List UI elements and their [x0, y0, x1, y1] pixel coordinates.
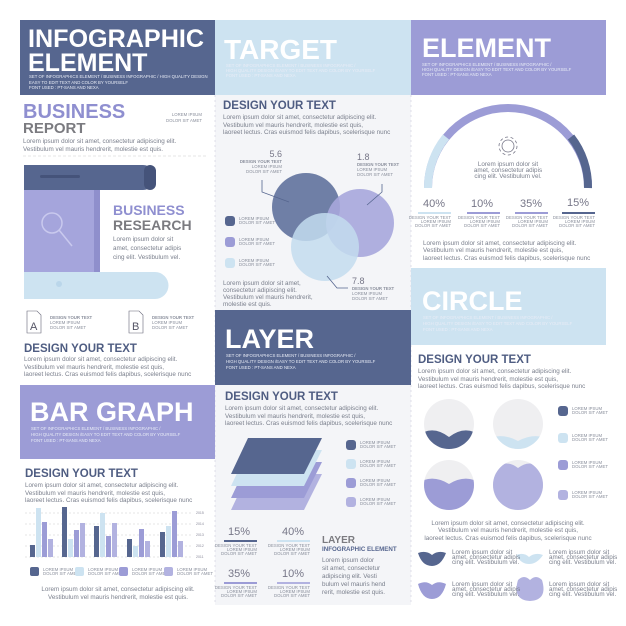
layer legend: DOLOR SIT AMET: [360, 463, 396, 468]
layer infographic element text: rerit, molestie est quis.: [322, 589, 385, 596]
header: circle: [411, 268, 606, 345]
element percentages: DOLOR SIT AMET: [464, 223, 500, 228]
element percentages: DOLOR SIT AMET: [415, 223, 451, 228]
venn diagram: DESIGN YOUR TEXT: [240, 159, 282, 164]
circle legend: DOLOR SIT AMET: [572, 437, 608, 442]
circle legend: DOLOR SIT AMET: [572, 410, 608, 415]
wave shapes row: amet, consectetur adipis: [549, 554, 617, 561]
header: layer: [215, 310, 411, 385]
business research graphic: [24, 165, 192, 299]
layer percentages: 10%: [282, 568, 304, 580]
doc icons A B: A: [30, 321, 38, 333]
doc icons A B: DOLOR SIT AMET: [152, 325, 188, 330]
layer percentages: DESIGN YOUR TEXT: [215, 585, 257, 590]
wave shapes row: [418, 549, 617, 601]
venn diagram: LOREM IPSUM: [357, 167, 388, 172]
header: layer: LAYER: [225, 324, 314, 354]
target text: DESIGN YOUR TEXT: [223, 100, 336, 112]
layer percentages: DESIGN YOUR TEXT: [268, 543, 310, 548]
layer legend: LOREM IPSUM: [360, 497, 391, 502]
bar legend: LOREM IPSUM: [132, 567, 163, 572]
layer percentages: DOLOR SIT AMET: [274, 551, 310, 556]
venn legend: DOLOR SIT AMET: [239, 262, 275, 267]
column backgrounds: [215, 95, 411, 605]
venn text: Lorem ipsum dolor sit amet,: [223, 280, 301, 287]
bar chart: 2015: [196, 511, 204, 515]
business research graphic: RESEARCH: [113, 217, 192, 233]
business report heading: [23, 101, 206, 156]
layer infographic element text: bulum vel mauris hend: [322, 581, 386, 588]
layer percentages: LOREM IPSUM: [280, 547, 310, 552]
header: infographic element: SET OF INFOGRAPHICS ELEMENT / BUSINESS INFOGRAPHIC / HIGH QUALITY DESIGN: [29, 74, 208, 79]
venn legend: LOREM IPSUM: [239, 237, 270, 242]
header: infographic element: INFOGRAPHIC: [28, 25, 204, 53]
layer percentages: DOLOR SIT AMET: [221, 551, 257, 556]
element text: Vestibulum vel mauris hendrerit, molestie est quis,: [423, 247, 563, 254]
header: element: [411, 20, 606, 95]
venn text: molestie est quis.: [223, 301, 272, 308]
wave shapes row: Lorem ipsum dolor sit: [549, 549, 609, 556]
layer text: laoreet lectus. Cras euismod felis dapibus, scelerisque nunc: [225, 420, 392, 427]
header: element: FONT USED : PT-SANS AND NEXA: [422, 72, 492, 77]
doc icons A B: B: [132, 321, 139, 333]
text block col1: Lorem ipsum dolor sit amet, consectetur adipiscing elit.: [24, 356, 178, 363]
bar graph footer text: Vestibulum vel mauris hendrerit, molestie est quis.: [48, 594, 188, 601]
header: target: FONT USED : PT-SANS AND NEXA: [226, 73, 296, 78]
business report heading: LOREM IPSUM: [172, 112, 202, 117]
business report heading: DOLOR SIT AMET: [166, 118, 202, 123]
element percentages: LOREM IPSUM: [470, 219, 500, 224]
header: layer: FONT USED : PT-SANS AND NEXA: [226, 365, 296, 370]
wave shapes row: amet, consectetur adipis: [452, 586, 520, 593]
text block col1: Vestibulum vel mauris hendrerit, molestie est quis,: [24, 364, 164, 371]
business report heading: Vestibulum vel mauris hendrerit, molestie est quis.: [23, 146, 163, 153]
wave shapes row: amet, consectetur adipis: [452, 554, 520, 561]
layer percentages: 40%: [282, 526, 304, 538]
venn diagram: DOLOR SIT AMET: [246, 169, 282, 174]
doc icons A B: LOREM IPSUM: [152, 320, 183, 325]
layer legend: DOLOR SIT AMET: [360, 501, 396, 506]
bar chart: 2012: [196, 544, 204, 548]
element percentages: DESIGN YOUR TEXT: [506, 215, 548, 220]
wave shapes row: amet, consectetur adipis: [549, 586, 617, 593]
bar graph footer text: [41, 586, 195, 601]
wave shapes row: Lorem ipsum dolor sit: [452, 549, 512, 556]
header: circle: FONT USED : PT-SANS AND NEXA: [423, 327, 493, 332]
layer percentages: LOREM IPSUM: [280, 589, 310, 594]
circle text: laoreet lectus. Cras euismod felis dapibus, scelerisque nunc: [418, 383, 585, 390]
header: element: ELEMENT: [422, 33, 552, 63]
header: target: HIGH QUALITY DESIGN /EASY TO EDIT TEXT AND COLOR BY YOURSELF: [226, 68, 376, 73]
layer percentages: DESIGN YOUR TEXT: [268, 585, 310, 590]
circle text: Vestibulum vel mauris hendrerit, molestie est quis,: [418, 376, 558, 383]
layer stack graphic: [231, 438, 322, 510]
bar graph text: [25, 468, 192, 504]
doc icons A B: DOLOR SIT AMET: [50, 325, 86, 330]
venn legend: DOLOR SIT AMET: [239, 220, 275, 225]
business research graphic: Lorem ipsum dolor sit: [113, 236, 173, 243]
layer legend: [346, 440, 396, 507]
text block col1: DESIGN YOUR TEXT: [24, 343, 137, 355]
bar chart: [25, 507, 204, 559]
venn diagram: LOREM IPSUM: [252, 164, 282, 169]
header: target: TARGET: [224, 34, 337, 65]
layer text: DESIGN YOUR TEXT: [225, 391, 338, 403]
bar legend: DOLOR SIT AMET: [132, 571, 168, 576]
element percentages: 10%: [471, 198, 493, 210]
circle footer text: Vestibulum vel mauris hendrerit, molestie est quis,: [438, 527, 578, 534]
layer infographic element text: [322, 535, 397, 596]
circle legend: LOREM IPSUM: [572, 490, 603, 495]
header: infographic element: FONT USED : PT-SANS AND NEXA: [29, 85, 99, 90]
layer percentages: 35%: [228, 568, 250, 580]
layer percentages: [215, 526, 310, 598]
layer percentages: DOLOR SIT AMET: [221, 593, 257, 598]
circle legend: DOLOR SIT AMET: [572, 494, 608, 499]
venn legend: [225, 216, 275, 268]
circle charts: [424, 399, 543, 515]
layer percentages: DOLOR SIT AMET: [274, 593, 310, 598]
header: circle: SET OF INFOGRAPHICS ELEMENT / BUSINESS INFOGRAPHIC /: [423, 315, 553, 320]
element percentages: 35%: [520, 198, 542, 210]
target text: Vestibulum vel mauris hendrerit, molestie est quis,: [223, 122, 363, 129]
venn diagram: [240, 149, 400, 301]
wave shapes row: cing elit. Vestibulum vel.: [452, 591, 519, 598]
arc gauge: amet, consectetur adipis: [474, 167, 542, 174]
circle text: [418, 354, 585, 390]
circle legend: LOREM IPSUM: [572, 433, 603, 438]
header: circle: HIGH QUALITY DESIGN /EASY TO EDIT TEXT AND COLOR BY YOURSELF: [423, 321, 573, 326]
header: bar graph: BAR GRAPH: [30, 397, 194, 427]
circle footer text: laoreet lectus. Cras euismod felis dapibus, scelerisque nunc: [424, 535, 592, 542]
arc gauge: cing elit. Vestibulum vel.: [474, 173, 542, 180]
layer infographic element text: Lorem ipsum dolor: [322, 557, 374, 564]
bar chart: 2014: [196, 522, 204, 526]
layer percentages: LOREM IPSUM: [227, 589, 257, 594]
bar graph text: Lorem ipsum dolor sit amet, consectetur adipiscing elit.: [25, 482, 179, 489]
layer text: Lorem ipsum dolor sit amet, consectetur adipiscing elit.: [225, 405, 379, 412]
layer infographic element text: LAYER: [322, 535, 356, 546]
venn legend: LOREM IPSUM: [239, 216, 270, 221]
header: bar graph: SET OF INFOGRAPHICS ELEMENT / BUSINESS INFOGRAPHIC /: [31, 426, 161, 431]
venn diagram: 1.8: [357, 152, 370, 162]
target text: laoreet lectus. Cras euismod felis dapibus, scelerisque nunc: [223, 129, 390, 136]
header: element: SET OF INFOGRAPHICS ELEMENT / BUSINESS INFOGRAPHIC /: [422, 62, 552, 67]
layer legend: DOLOR SIT AMET: [360, 444, 396, 449]
bar legend: DOLOR SIT AMET: [43, 571, 79, 576]
bar legend: [30, 567, 213, 576]
circle text: DESIGN YOUR TEXT: [418, 354, 531, 366]
venn diagram: 5.6: [269, 149, 282, 159]
venn diagram: 7.8: [352, 276, 365, 286]
bar graph footer text: Lorem ipsum dolor sit amet, consectetur adipiscing elit.: [41, 586, 195, 593]
circle text: Lorem ipsum dolor sit amet, consectetur adipiscing elit.: [418, 368, 572, 375]
element percentages: [409, 197, 595, 228]
venn diagram: LOREM IPSUM: [352, 291, 383, 296]
business research graphic: amet, consectetur adipis: [113, 245, 181, 252]
layer text: Vestibulum vel mauris hendrerit, molestie est quis,: [225, 413, 365, 420]
layer legend: DOLOR SIT AMET: [360, 482, 396, 487]
layer percentages: DESIGN YOUR TEXT: [215, 543, 257, 548]
circle footer text: [424, 520, 592, 542]
target text: Lorem ipsum dolor sit amet, consectetur adipiscing elit.: [223, 114, 377, 121]
header: target: [215, 20, 411, 95]
text block col1: [24, 343, 191, 378]
bar legend: LOREM IPSUM: [88, 567, 119, 572]
element text: Lorem ipsum dolor sit amet, consectetur adipiscing elit.: [423, 240, 577, 247]
doc icons A B: DESIGN YOUR TEXT: [50, 315, 93, 320]
element percentages: LOREM IPSUM: [565, 219, 595, 224]
header: bar graph: FONT USED : PT-SANS AND NEXA: [31, 438, 101, 443]
element percentages: 40%: [423, 198, 445, 210]
doc icons A B: [27, 311, 195, 333]
header: bar graph: HIGH QUALITY DESIGN /EASY TO EDIT TEXT AND COLOR BY YOURSELF: [31, 432, 181, 437]
bar legend: LOREM IPSUM: [177, 567, 208, 572]
bar graph text: laoreet lectus. Cras euismod felis dapibus, scelerisque nunc: [25, 497, 192, 504]
venn diagram: DESIGN YOUR TEXT: [357, 162, 400, 167]
venn text: Vestibulum vel mauris hendrerit,: [223, 294, 313, 301]
layer legend: LOREM IPSUM: [360, 459, 391, 464]
layer legend: LOREM IPSUM: [360, 440, 391, 445]
business report heading: BUSINESS: [23, 101, 125, 123]
venn legend: LOREM IPSUM: [239, 258, 270, 263]
layer percentages: LOREM IPSUM: [227, 547, 257, 552]
wave shapes row: Lorem ipsum dolor sit: [452, 581, 512, 588]
target text: [223, 100, 390, 136]
wave shapes row: cing elit. Vestibulum vel.: [549, 559, 616, 566]
header: layer: SET OF INFOGRAPHICS ELEMENT / BUSINESS INFOGRAPHIC /: [226, 353, 356, 358]
doc icons A B: DESIGN YOUR TEXT: [152, 315, 195, 320]
wave shapes row: Lorem ipsum dolor sit: [549, 581, 609, 588]
element percentages: DOLOR SIT AMET: [559, 223, 595, 228]
venn diagram: DOLOR SIT AMET: [352, 296, 388, 301]
layer infographic element text: INFOGRAPHIC ELEMENT: [322, 546, 397, 553]
venn legend: DOLOR SIT AMET: [239, 241, 275, 246]
element text: laoreet lectus. Cras euismod felis dapibus, scelerisque nunc: [423, 255, 590, 262]
circle legend: [558, 406, 608, 500]
circle legend: DOLOR SIT AMET: [572, 464, 608, 469]
element percentages: DESIGN YOUR TEXT: [553, 215, 595, 220]
header: element: HIGH QUALITY DESIGN /EASY TO EDIT TEXT AND COLOR BY YOURSELF: [422, 67, 572, 72]
bar graph text: DESIGN YOUR TEXT: [25, 468, 138, 480]
venn text: [223, 280, 313, 308]
element percentages: 15%: [567, 197, 589, 209]
element text: [423, 240, 590, 262]
arc gauge: Lorem ipsum dolor sit: [478, 161, 538, 168]
bar legend: LOREM IPSUM: [43, 567, 74, 572]
element percentages: DESIGN YOUR TEXT: [409, 215, 451, 220]
wave shapes row: cing elit. Vestibulum vel.: [549, 591, 616, 598]
layer legend: LOREM IPSUM: [360, 478, 391, 483]
bar legend: DOLOR SIT AMET: [88, 571, 124, 576]
circle legend: LOREM IPSUM: [572, 406, 603, 411]
arc gauge: [428, 108, 588, 188]
bar legend: DOLOR SIT AMET: [177, 571, 213, 576]
element percentages: DESIGN YOUR TEXT: [458, 215, 500, 220]
circle legend: LOREM IPSUM: [572, 460, 603, 465]
header: bar graph: [20, 385, 215, 459]
venn diagram: DOLOR SIT AMET: [357, 172, 393, 177]
layer text: [225, 391, 392, 427]
doc icons A B: LOREM IPSUM: [50, 320, 81, 325]
header: target: SET OF INFOGRAPHICS ELEMENT / BUSINESS INFOGRAPHIC /: [226, 63, 356, 68]
header: infographic element: ELEMENT: [28, 49, 147, 77]
layer infographic element text: sit amet, consectetur: [322, 565, 380, 572]
header: infographic element: EASY TO EDIT TEXT AND COLOR BY YOURSELF: [29, 80, 128, 85]
text block col1: laoreet lectus. Cras euismod felis dapibus, scelerisque nunc: [24, 371, 191, 378]
business research graphic: cing elit. Vestibulum vel.: [113, 254, 180, 261]
header: circle: CIRCLE: [422, 286, 522, 316]
layer infographic element text: adipiscing elit. Vesti: [322, 573, 377, 580]
bar chart: 2013: [196, 533, 204, 537]
business research graphic: BUSINESS: [113, 202, 185, 218]
element percentages: LOREM IPSUM: [421, 219, 451, 224]
layer percentages: 15%: [228, 526, 250, 538]
wave shapes row: cing elit. Vestibulum vel.: [452, 559, 519, 566]
bar graph text: Vestibulum vel mauris hendrerit, molestie est quis,: [25, 490, 165, 497]
business report heading: REPORT: [23, 120, 86, 137]
header: layer: HIGH QUALITY DESIGN /EASY TO EDIT TEXT AND COLOR BY YOURSELF: [226, 359, 376, 364]
circle footer text: Lorem ipsum dolor sit amet, consectetur adipiscing elit.: [431, 520, 585, 527]
element percentages: LOREM IPSUM: [518, 219, 548, 224]
venn text: consectetur adipiscing elit.: [223, 287, 297, 294]
header: infographic element: [20, 20, 215, 95]
bar chart: 2011: [196, 555, 204, 559]
element percentages: DOLOR SIT AMET: [512, 223, 548, 228]
business report heading: Lorem ipsum dolor sit amet, consectetur adipiscing elit.: [23, 138, 177, 145]
venn diagram: DESIGN YOUR TEXT: [352, 286, 395, 291]
